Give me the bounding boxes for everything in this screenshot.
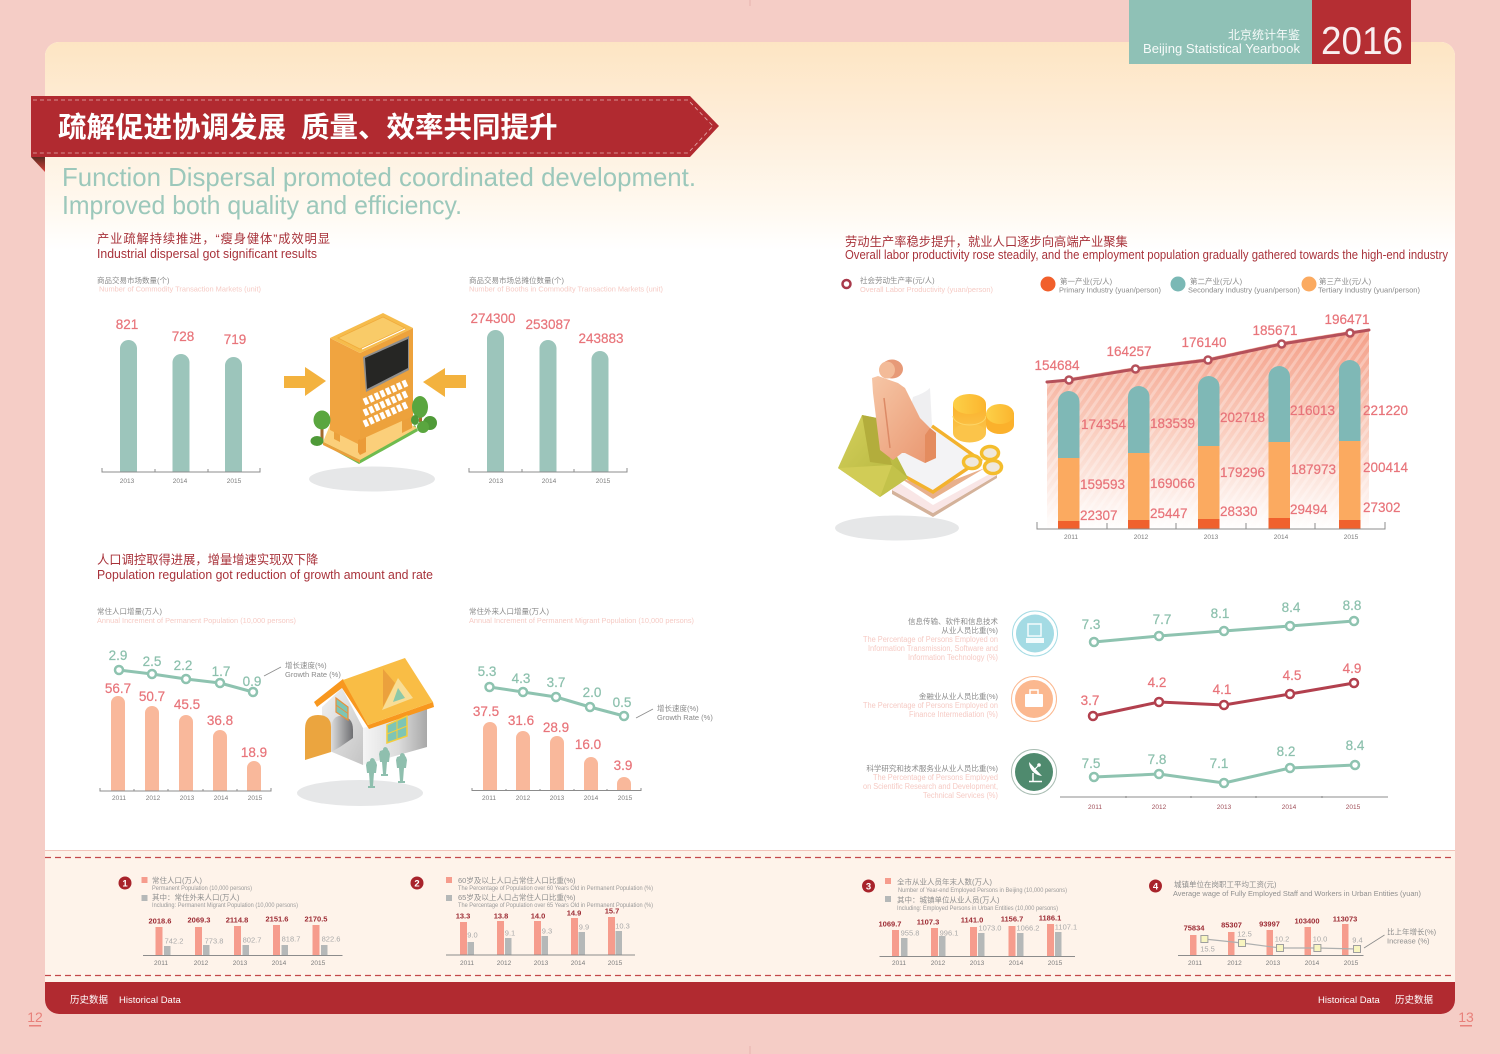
- chart: employment share by high-end industry: 2012: [1152, 804, 1167, 811]
- subtitle: Improved both quality and efficiency.: [62, 190, 462, 220]
- historical chart 2: population ageing: 13.8: [494, 912, 508, 920]
- title banner: 疏解促进协调发展: [58, 112, 286, 144]
- footer band: [45, 982, 1455, 1014]
- chart: annual increment of permanent population: 2011: [112, 795, 126, 802]
- chart: annual increment of permanent population: 50.7: [139, 689, 165, 704]
- chart: number of booths in commodity transaction markets: [469, 275, 663, 485]
- heading: labor productivity: [845, 234, 1449, 262]
- header tab: yearbook name: Beijing Statistical Yearbook: [1143, 42, 1301, 56]
- historical chart 3: employed persons: Including: Employed Persons in Urban Entities (10,000 persons): [897, 906, 1058, 912]
- line: overall labor productivity: [1047, 330, 1369, 384]
- historical chart 1: permanent population: 818.7: [282, 934, 300, 944]
- column: 2015: [1339, 360, 1360, 529]
- chart: number of booths in commodity transaction markets: 2014: [542, 478, 557, 485]
- historical chart 1: permanent population: 2018.6: [149, 916, 171, 926]
- chart: employment share by high-end industry: 2014: [1282, 804, 1297, 811]
- historical chart 4: average wage: Average wage of Fully Employed Staff and Workers in Urban Entities (yuan): [1173, 889, 1421, 898]
- legend: labor productivity: Secondary Industry (yuan/person): [1188, 286, 1300, 294]
- historical chart 1: permanent population: 802.7: [243, 936, 261, 944]
- chart: annual increment of permanent migrant population: 3.9: [614, 758, 632, 773]
- row: information technology: 信息传输、软件和信息技术: [908, 616, 998, 626]
- row: information technology: 8.4: [1282, 600, 1301, 615]
- chart: annual increment of permanent population: 2.2: [174, 658, 192, 673]
- row: scientific research: 科学研究和技术服务业从业人员比重(%): [866, 763, 998, 773]
- historical chart 2: population ageing: 13.3: [456, 912, 470, 920]
- historical chart 1: permanent population: 其中：常住外来人口(万人): [152, 892, 240, 902]
- chart: annual increment of permanent population: 0.9: [243, 674, 261, 689]
- historical chart 2: population ageing: 2014: [571, 960, 586, 967]
- row: scientific research: 8.2: [1277, 744, 1295, 759]
- historical chart 4: average wage: Increase (%): [1387, 936, 1430, 946]
- historical chart 2: population ageing: 60岁及以上人口占常住人口比重(%): [458, 875, 576, 885]
- footer band: 历史数据: [1395, 994, 1434, 1006]
- value labels: 216013: [1290, 403, 1335, 418]
- chart: annual increment of permanent migrant population: 4.3: [512, 671, 530, 686]
- row: scientific research: on Scientific Research and Development,: [863, 782, 998, 791]
- historical chart 4: average wage: 9.4: [1352, 936, 1363, 944]
- historical chart 3: employed persons: 1066.2: [1017, 924, 1039, 932]
- historical chart 2: population ageing: 14.0: [531, 912, 545, 920]
- value labels: 28330: [1220, 504, 1258, 519]
- historical chart 3: employed persons: 996.1: [940, 928, 958, 938]
- legend: labor productivity: Overall Labor Productivity (yuan/person): [860, 285, 993, 294]
- chart: annual increment of permanent migrant population: Annual Increment of Permanent Migrant Population (10,000 persons): [469, 616, 694, 625]
- value labels: 154684: [1034, 358, 1080, 373]
- footer band: Historical Data: [1318, 995, 1380, 1006]
- historical chart 2: population ageing: 2015: [608, 960, 623, 967]
- chart: annual increment of permanent population: 增长速度(%): [285, 660, 327, 670]
- historical chart 4: average wage: 4: [1153, 882, 1159, 892]
- column: 2014: [1268, 366, 1290, 529]
- row: information technology: 8.1: [1211, 606, 1229, 621]
- chart: labor productivity stacked columns: 2011: [1064, 534, 1078, 541]
- chart: number of commodity transaction markets: 2014: [173, 478, 188, 485]
- chart: number of commodity transaction markets: 728: [172, 329, 194, 344]
- historical chart 4: average wage: 93997: [1259, 920, 1280, 928]
- historical chart 1: permanent population: Including: Permanent Migrant Population (10,000 persons): [152, 903, 298, 909]
- historical chart 4: average wage: 15.5: [1200, 944, 1215, 954]
- heading: industrial dispersal: Industrial dispersal got significant results: [97, 247, 317, 261]
- value labels: 185671: [1252, 323, 1298, 338]
- row: scientific research: 7.1: [1210, 756, 1228, 771]
- historical chart 3: employed persons: 1186.1: [1039, 914, 1061, 922]
- row: information technology: 8.8: [1343, 598, 1361, 613]
- historical chart 2: population ageing: 14.9: [567, 908, 581, 918]
- heading: labor productivity: Overall labor productivity rose steadily, and the employment population gradually gathered towards the high-end industry: [845, 248, 1449, 262]
- historical chart 1: permanent population: 2151.6: [266, 914, 288, 924]
- historical chart 2: population ageing: 9.9: [579, 922, 589, 932]
- chart: number of commodity transaction markets: 2015: [227, 478, 242, 485]
- historical chart 4: average wage: 75834: [1184, 924, 1205, 932]
- chart: annual increment of permanent population: Annual Increment of Permanent Population (10,000 persons): [97, 616, 296, 625]
- legend: labor productivity: Tertiary Industry (yuan/person): [1318, 286, 1420, 294]
- chart: labor productivity stacked columns: 2014: [1274, 534, 1289, 541]
- header tab: year: [1312, 0, 1411, 64]
- historical chart 3: employed persons: 2013: [970, 960, 985, 967]
- chart: annual increment of permanent population: 2012: [146, 795, 161, 802]
- title banner: 质量、效率共同提升: [301, 112, 558, 144]
- historical chart 2: population ageing: 9.3: [542, 926, 552, 936]
- historical chart 3: employed persons: 3: [866, 882, 871, 892]
- historical chart 3: employed persons: 1107.1: [1055, 922, 1077, 932]
- row: scientific research: 7.8: [1148, 752, 1166, 767]
- row: finance: [863, 661, 1361, 722]
- value labels: 202718: [1220, 410, 1265, 425]
- historical chart 4: average wage: 比上年增长(%): [1387, 926, 1437, 936]
- area: overall labor productivity: [1047, 330, 1369, 530]
- chart: annual increment of permanent population: Growth Rate (%): [285, 670, 341, 679]
- row: information technology: Information Technology (%): [908, 653, 998, 662]
- historical chart 3: employed persons: 1107.3: [917, 918, 939, 926]
- historical chart 4: average wage: 2013: [1266, 960, 1281, 967]
- chart: annual increment of permanent migrant population: 5.3: [478, 664, 496, 679]
- historical chart 3: employed persons: 955.8: [901, 928, 919, 938]
- value labels: 187973: [1291, 462, 1336, 477]
- chart: annual increment of permanent population: 36.8: [207, 713, 233, 728]
- historical chart 4: average wage: 10.2: [1275, 934, 1289, 944]
- historical chart 4: average wage: [1149, 879, 1437, 967]
- heading: industrial dispersal: 产业疏解持续推进，“瘦身健体”成效明显: [97, 231, 330, 246]
- historical chart 4: average wage: 85307: [1221, 920, 1242, 930]
- value labels: 176140: [1181, 335, 1227, 350]
- row: information technology: 7.3: [1082, 617, 1100, 632]
- row: finance: Finance Intermediation (%): [909, 710, 998, 719]
- chart: annual increment of permanent population: 常住人口增量(万人): [97, 606, 162, 616]
- chart: annual increment of permanent migrant population: 2013: [550, 795, 565, 802]
- chart: annual increment of permanent population: 2.5: [143, 654, 161, 669]
- value labels: 22307: [1080, 508, 1118, 523]
- chart: annual increment of permanent population: 2013: [180, 795, 195, 802]
- chart: annual increment of permanent migrant population: 0.5: [613, 695, 631, 710]
- chart: annual increment of permanent migrant population: 28.9: [543, 720, 569, 735]
- value labels: 25447: [1150, 506, 1188, 521]
- row: scientific research: 8.4: [1346, 738, 1365, 753]
- historical chart 2: population ageing: 10.3: [615, 922, 630, 930]
- legend: labor productivity: Primary Industry (yuan/person): [1059, 286, 1161, 294]
- historical chart 2: population ageing: [410, 875, 653, 967]
- header tab: yearbook name: 北京统计年鉴: [1228, 28, 1300, 42]
- historical chart 3: employed persons: 其中：城镇单位从业人员(万人): [897, 894, 1000, 904]
- legend: labor productivity: 第二产业(元/人): [1190, 276, 1243, 286]
- historical chart 3: employed persons: 2012: [931, 960, 946, 967]
- historical chart 3: employed persons: 2015: [1048, 960, 1063, 967]
- historical chart 1: permanent population: 2114.8: [226, 916, 248, 924]
- chart: number of commodity transaction markets: [97, 275, 261, 485]
- historical chart 4: average wage: 2011: [1188, 960, 1202, 967]
- row: scientific research: Technical Services (%): [923, 791, 998, 800]
- value labels: 29494: [1290, 502, 1328, 517]
- row: finance: 4.1: [1213, 682, 1231, 697]
- chart: annual increment of permanent population: 2.9: [109, 648, 127, 663]
- chart: number of commodity transaction markets: 商品交易市场数量(个): [97, 275, 170, 285]
- chart: number of booths in commodity transaction markets: 2013: [489, 478, 504, 485]
- chart: number of booths in commodity transaction markets: 2015: [596, 478, 611, 485]
- row: finance: 金融业从业人员比重(%): [919, 691, 998, 701]
- historical chart 1: permanent population: 2170.5: [305, 914, 327, 924]
- chart: annual increment of permanent migrant population: 2012: [516, 795, 531, 802]
- header tab: year: 2016: [1321, 20, 1403, 63]
- row: scientific research: [863, 738, 1365, 800]
- chart: annual increment of permanent migrant population: 37.5: [473, 704, 499, 719]
- chart: number of booths in commodity transaction markets: 243883: [578, 331, 624, 346]
- historical chart 3: employed persons: 2014: [1009, 960, 1024, 967]
- chart: number of commodity transaction markets: 719: [224, 332, 246, 347]
- historical chart 1: permanent population: Permanent Population (10,000 persons): [152, 886, 252, 892]
- historical chart 2: population ageing: 2: [414, 878, 420, 890]
- chart: employment share by high-end industry: [863, 598, 1388, 811]
- heading: labor productivity: 劳动生产率稳步提升，就业人口逐步向高端产业聚集: [845, 234, 1128, 249]
- row: finance: The Percentage of Persons Employed on: [863, 701, 998, 710]
- legend: labor productivity: 第一产业(元/人): [1060, 276, 1113, 286]
- column: 2013: [1198, 376, 1220, 529]
- historical chart 3: employed persons: 2011: [892, 960, 906, 967]
- chart: number of commodity transaction markets: 821: [116, 317, 138, 332]
- historical chart 2: population ageing: 15.7: [605, 906, 619, 916]
- historical chart 1: permanent population: 2069.3: [188, 916, 210, 924]
- chart: annual increment of permanent migrant population: 31.6: [508, 713, 534, 728]
- row: finance: 3.7: [1081, 693, 1099, 708]
- value labels: [1034, 312, 1409, 523]
- historical chart 1: permanent population: 2011: [154, 960, 168, 967]
- historical chart 1: permanent population: 822.6: [322, 934, 340, 944]
- illustration: worker with documents and coins: [835, 360, 1014, 540]
- row: information technology: 从业人员比重(%): [941, 625, 998, 635]
- historical chart 4: average wage: 2012: [1227, 960, 1242, 967]
- chart: annual increment of permanent population: 1.7: [212, 664, 230, 679]
- chart: annual increment of permanent migrant population: 常住外来人口增量(万人): [469, 606, 549, 616]
- chart: annual increment of permanent population: 2014: [214, 795, 229, 802]
- chart: number of booths in commodity transaction markets: 253087: [525, 317, 571, 332]
- historical chart 2: population ageing: 2012: [497, 960, 512, 967]
- row: information technology: 7.7: [1153, 612, 1171, 627]
- historical chart 2: population ageing: 9.1: [505, 928, 515, 938]
- historical chart 1: permanent population: 2015: [311, 960, 326, 967]
- row: finance: 4.2: [1148, 675, 1166, 690]
- historical chart 3: employed persons: Number of Year-end Employed Persons in Beijing (10,000 persons): [898, 888, 1067, 894]
- historical chart 2: population ageing: 2013: [534, 960, 549, 967]
- historical chart 1: permanent population: 1: [122, 878, 128, 890]
- value labels: 196471: [1324, 312, 1370, 327]
- heading: industrial dispersal: [97, 231, 330, 261]
- column: 2012: [1128, 386, 1150, 529]
- historical chart 1: permanent population: 742.2: [165, 936, 183, 946]
- illustration: market building with arrows: [284, 313, 466, 492]
- historical chart 4: average wage: 2015: [1344, 960, 1359, 967]
- row: finance: 4.5: [1283, 668, 1301, 683]
- historical chart 3: employed persons: 全市从业人员年末人数(万人): [897, 876, 992, 886]
- chart: annual increment of permanent population: 2015: [248, 795, 263, 802]
- chart: number of booths in commodity transaction markets: Number of Booths in Commodity Transaction Markets (unit): [469, 284, 663, 294]
- subtitle: [62, 162, 696, 220]
- historical chart 3: employed persons: 1156.7: [1001, 914, 1023, 924]
- value labels: 221220: [1363, 403, 1408, 418]
- chart: number of booths in commodity transaction markets: 274300: [470, 311, 516, 326]
- chart: number of commodity transaction markets: 2013: [120, 478, 135, 485]
- value labels: 183539: [1150, 416, 1195, 431]
- historical chart 4: average wage: 城镇单位在岗职工平均工资(元): [1174, 879, 1277, 889]
- historical chart 1: permanent population: 2013: [233, 960, 248, 967]
- historical chart 1: permanent population: 常住人口(万人): [152, 875, 202, 885]
- value labels: 159593: [1080, 477, 1125, 492]
- chart: employment share by high-end industry: 2013: [1217, 804, 1232, 811]
- row: finance: 4.9: [1343, 661, 1361, 676]
- chart: number of booths in commodity transaction markets: 商品交易市场总摊位数量(个): [469, 275, 564, 285]
- historical chart 2: population ageing: The Percentage of Population over 65 Years Old in Permanent Population (%): [458, 903, 653, 909]
- row: scientific research: 7.5: [1082, 756, 1100, 771]
- chart: annual increment of permanent population: 18.9: [241, 745, 267, 760]
- chart: labor productivity stacked columns: 2012: [1134, 534, 1149, 541]
- value labels: 27302: [1363, 500, 1401, 515]
- chart: annual increment of permanent migrant population: 3.7: [547, 675, 565, 690]
- chart: labor productivity stacked columns: 2013: [1204, 534, 1219, 541]
- chart: annual increment of permanent population: 45.5: [174, 697, 200, 712]
- chart: employment share by high-end industry: 2015: [1346, 804, 1361, 811]
- chart: annual increment of permanent migrant population: 增长速度(%): [657, 703, 699, 713]
- footer band: 历史数据: [70, 994, 109, 1006]
- value labels: 164257: [1106, 344, 1152, 359]
- chart: annual increment of permanent population: 56.7: [105, 681, 131, 696]
- chart: labor productivity stacked columns: [1034, 312, 1409, 541]
- title banner: [31, 96, 719, 172]
- heading: population regulation: [97, 552, 433, 582]
- historical chart 2: population ageing: 2011: [460, 960, 474, 967]
- historical chart 4: average wage: 113073: [1333, 914, 1357, 924]
- row: scientific research: The Percentage of Persons Employed: [873, 773, 998, 782]
- chart: annual increment of permanent population: [97, 606, 341, 802]
- row: information technology: [863, 598, 1361, 662]
- legend: labor productivity: 第三产业(元/人): [1319, 276, 1372, 286]
- chart: annual increment of permanent migrant population: 2015: [618, 795, 633, 802]
- historical chart 3: employed persons: 1073.0: [979, 924, 1001, 932]
- historical chart 4: average wage: 103400: [1294, 916, 1320, 926]
- chart: number of commodity transaction markets: Number of Commodity Transaction Markets (unit): [99, 284, 261, 294]
- page number: right: 13: [1458, 1009, 1474, 1025]
- historical chart 2: population ageing: The Percentage of Population over 60 Years Old in Permanent Population (%): [458, 886, 653, 892]
- value labels: 174354: [1081, 417, 1127, 432]
- row: information technology: The Percentage of Persons Employed on: [863, 635, 998, 644]
- historical chart 1: permanent population: 2012: [194, 960, 209, 967]
- row: information technology: Information Transmission, Software and: [868, 644, 998, 653]
- historical chart 4: average wage: 2014: [1305, 960, 1320, 967]
- historical chart 1: permanent population: [118, 875, 342, 967]
- illustration: house with people: [297, 658, 434, 806]
- historical chart 2: population ageing: 65岁及以上人口占常住人口比重(%): [458, 892, 576, 902]
- page number: left: 12: [27, 1009, 43, 1025]
- historical chart 3: employed persons: [862, 876, 1077, 967]
- header tab: yearbook name: [1129, 0, 1312, 64]
- chart: annual increment of permanent migrant population: 2014: [584, 795, 599, 802]
- chart: annual increment of permanent migrant population: 2011: [482, 795, 496, 802]
- historical chart 4: average wage: 12.5: [1237, 930, 1252, 938]
- chart: labor productivity stacked columns: 2015: [1344, 534, 1359, 541]
- heading: population regulation: 人口调控取得进展，增量增速实现双下降: [97, 552, 318, 567]
- chart: annual increment of permanent migrant population: 2.0: [583, 685, 601, 700]
- historical chart 3: employed persons: 1141.0: [961, 916, 983, 924]
- historical chart 3: employed persons: 1069.7: [879, 920, 901, 928]
- legend: labor productivity: [842, 275, 1420, 294]
- chart: employment share by high-end industry: 2011: [1088, 804, 1102, 811]
- historical chart 2: population ageing: 9.0: [467, 930, 478, 940]
- historical chart 4: average wage: 10.0: [1313, 934, 1327, 944]
- value labels: 169066: [1150, 476, 1195, 491]
- historical chart 1: permanent population: 773.8: [205, 936, 223, 946]
- chart: annual increment of permanent migrant population: 16.0: [575, 737, 601, 752]
- subtitle: Function Dispersal promoted coordinated development.: [62, 162, 696, 192]
- panel: historical data strip: [45, 850, 1455, 982]
- chart: annual increment of permanent migrant population: [469, 606, 713, 802]
- historical chart 1: permanent population: 2014: [272, 960, 287, 967]
- value labels: 200414: [1363, 460, 1409, 475]
- heading: population regulation: Population regulation got reduction of growth amount and rate: [97, 568, 433, 582]
- chart: annual increment of permanent migrant population: Growth Rate (%): [657, 713, 713, 722]
- column: 2011: [1058, 391, 1080, 529]
- value labels: 179296: [1220, 465, 1265, 480]
- legend: labor productivity: 社会劳动生产率(元/人): [860, 275, 935, 285]
- footer band: Historical Data: [119, 995, 181, 1006]
